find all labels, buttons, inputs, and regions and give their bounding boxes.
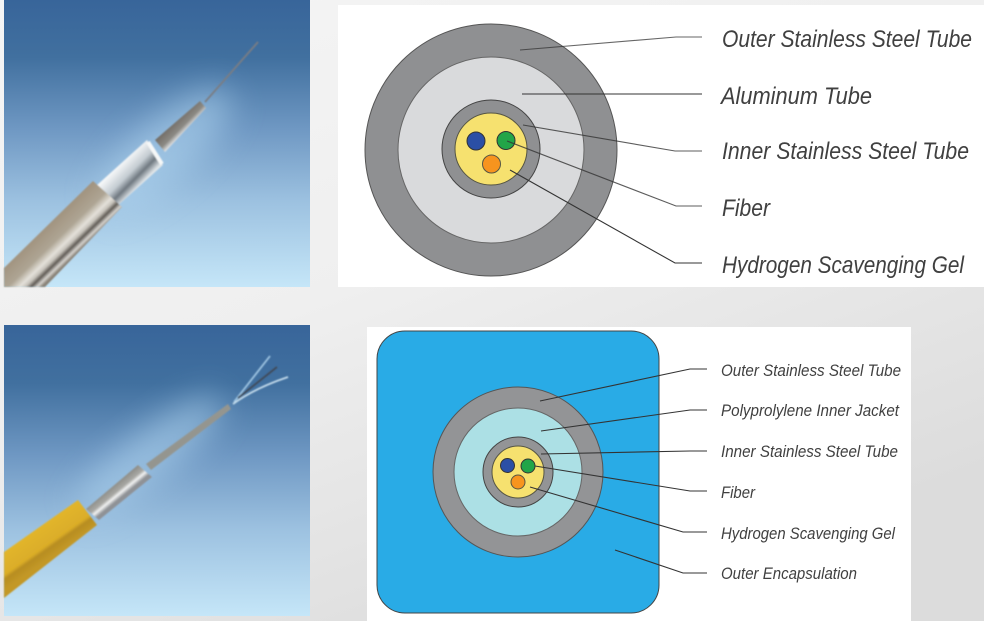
thin stranded tube — [146, 404, 231, 470]
leader lines — [507, 37, 702, 263]
panel: stainless steel cable cross-section — [338, 5, 984, 287]
aluminum sleeve — [96, 140, 163, 208]
outer stainless steel tube ring — [365, 24, 617, 276]
fiber: orange — [482, 155, 500, 173]
inner tube — [155, 101, 206, 152]
label: Aluminum Tube: Aluminum Tube — [719, 83, 872, 110]
fiber: blue — [500, 458, 514, 472]
photo: encapsulated cable — [4, 325, 310, 616]
label: Outer Encapsulation: Outer Encapsulation — [721, 564, 857, 583]
outer stainless steel tube ring — [433, 387, 603, 557]
fiber: green — [521, 459, 535, 473]
leader lines — [530, 369, 707, 573]
silver inner tube — [86, 465, 152, 520]
aluminum tube ring — [398, 57, 584, 243]
label: Fiber: Fiber — [722, 195, 771, 222]
yellow outer encapsulation — [4, 500, 97, 598]
label: Outer Stainless Steel Tube: Outer Stainless Steel Tube — [721, 361, 901, 380]
fiber: orange — [511, 475, 525, 489]
panel: encapsulated cable cross-section — [367, 327, 911, 621]
inner stainless steel tube ring — [442, 100, 540, 198]
hydrogen scavenging gel — [455, 113, 527, 185]
polypropylene inner jacket — [454, 408, 582, 536]
outer encapsulation square — [377, 331, 659, 613]
photo: stainless steel tube cable — [4, 0, 310, 287]
fiber: blue — [467, 132, 485, 150]
inner stainless steel tube ring — [483, 437, 553, 507]
outer steel tube — [4, 181, 122, 287]
hydrogen scavenging gel — [492, 446, 544, 498]
label: Polyprolylene Inner Jacket: Polyprolylene Inner Jacket — [721, 401, 900, 420]
sleeve end highlight — [148, 142, 162, 164]
fiber: green — [497, 132, 515, 150]
fan of fibers — [233, 356, 288, 404]
fiber strand — [205, 42, 258, 102]
label: Inner Stainless Steel Tube: Inner Stainless Steel Tube — [721, 442, 898, 461]
label: Fiber: Fiber — [721, 483, 756, 502]
label: Hydrogen Scavenging Gel: Hydrogen Scavenging Gel — [721, 524, 896, 543]
